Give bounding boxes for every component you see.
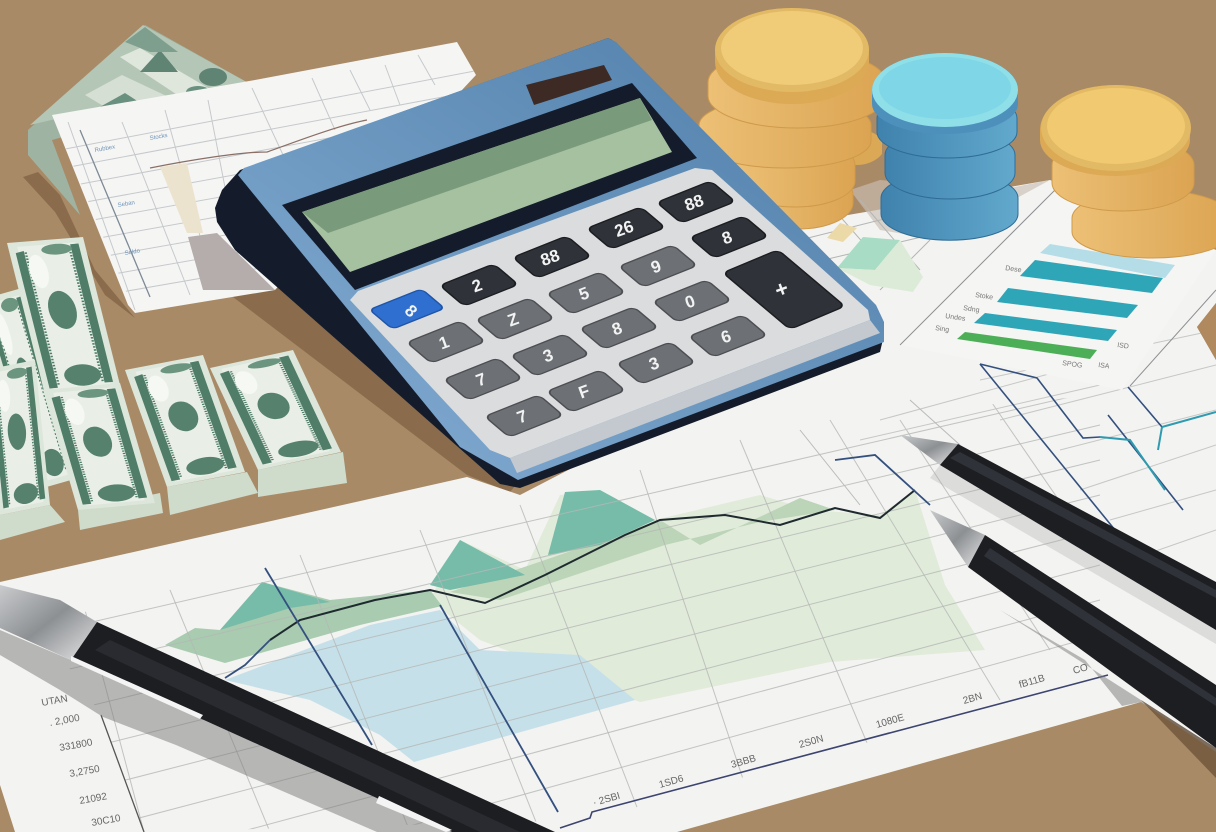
key labels: 5 <box>576 283 592 304</box>
bar: green <box>957 332 1097 359</box>
key labels: F <box>576 381 592 403</box>
bottom axis labels: 1SD6 <box>658 773 685 791</box>
key labels: 8 <box>401 301 421 321</box>
bottom axis labels: 2BN <box>962 691 984 707</box>
key labels: 1 <box>436 332 452 353</box>
small chart: squares behind the calculator <box>800 180 1050 292</box>
area: teal peaks <box>220 490 655 630</box>
sheet: top left line chart: Seban <box>117 200 135 209</box>
sheet: top left line chart: Stocks <box>149 133 168 142</box>
bottom axis labels: 1080E <box>875 712 906 731</box>
bar: teal <box>974 313 1117 341</box>
bottom axis labels <box>592 662 1089 809</box>
left axis labels: 30C10 <box>91 813 122 829</box>
shadow: money and sheet on desk <box>23 172 135 318</box>
left axis labels: 3,2750 <box>69 764 101 780</box>
banknotes: bottom left stacks <box>0 237 347 540</box>
main paper sheet <box>0 180 1216 832</box>
key labels: 9 <box>648 256 664 277</box>
key labels: + <box>771 275 792 303</box>
bar chart labels: ISA <box>1098 362 1110 371</box>
calculator blue body <box>238 38 884 480</box>
display shadow band <box>302 98 652 233</box>
left axis labels: . 2,000 <box>49 713 81 729</box>
display screen <box>302 98 672 272</box>
area chart: green and blue bands with trend line <box>165 490 985 762</box>
coins: left gold stack <box>699 8 886 229</box>
bottom axis labels: 2S0N <box>798 733 825 751</box>
blue key <box>369 289 445 329</box>
banknote stack: top left <box>28 25 252 215</box>
keypad panel <box>350 168 870 458</box>
bar: teal <box>1020 260 1163 293</box>
sheet: top left line chart: Saldo <box>124 248 141 257</box>
key labels: 26 <box>612 217 636 241</box>
key labels: 7 <box>514 406 530 427</box>
sheet: top left line chart: Rubbex <box>94 144 116 154</box>
dark keys <box>440 181 845 329</box>
bar: teal <box>997 288 1138 318</box>
left axis labels: 331800 <box>59 737 94 754</box>
key labels: 6 <box>718 326 734 347</box>
shadow: calculator on desk <box>215 215 520 492</box>
display bezel <box>282 83 697 290</box>
bar: pale blue <box>1040 244 1175 278</box>
left axis labels <box>41 694 122 829</box>
pen shadow on paper: bottom-left pen <box>0 630 452 832</box>
key labels: 8 <box>719 227 735 248</box>
key labels: Z <box>505 309 521 331</box>
bottom axis labels: CO <box>1072 662 1089 677</box>
key labels: 88 <box>682 191 706 215</box>
key labels <box>401 191 792 427</box>
bottom axis labels: fB11B <box>1018 673 1047 691</box>
key labels: 7 <box>473 369 489 390</box>
right line charts <box>800 330 1216 560</box>
trend line and navy lines <box>225 455 930 812</box>
key labels: 3 <box>646 353 662 374</box>
bottom axis labels: · 2SBI <box>592 791 622 809</box>
pen: lower right <box>930 510 1216 748</box>
sheet: bar chart <box>900 190 1216 390</box>
main chart grid <box>40 390 1100 832</box>
pen shadows: right pens <box>930 465 1216 778</box>
left axis labels: 21092 <box>79 791 108 807</box>
brown gap at the right edge <box>1197 303 1216 360</box>
sheet: top left line chart <box>52 42 480 313</box>
calculator base <box>215 38 884 488</box>
coins: blue stack <box>872 53 1018 240</box>
chart axis: bottom line <box>560 675 1108 828</box>
chart axis: left line <box>101 715 144 832</box>
bar chart labels: Sdng <box>963 305 980 314</box>
area: sage band <box>165 582 442 663</box>
calculator <box>215 38 884 488</box>
coins: right gold stack <box>1040 85 1216 258</box>
bar chart labels: Undes <box>945 313 966 323</box>
bar chart labels: Sing <box>935 325 950 334</box>
bar chart labels: SPOG <box>1062 360 1083 370</box>
area: blue <box>225 610 635 762</box>
area: light green <box>430 490 985 702</box>
left axis labels: UTAN <box>41 694 69 709</box>
bar chart labels: Stoke <box>975 292 994 301</box>
key labels: 88 <box>538 246 562 270</box>
bar chart labels: ISD <box>1117 342 1129 351</box>
pen: bottom left <box>0 585 555 832</box>
front lip <box>510 320 880 473</box>
solar panel <box>526 65 612 105</box>
bottom axis labels: 3BBB <box>730 753 758 771</box>
key labels: 2 <box>469 275 485 296</box>
pen: upper right <box>900 435 1216 630</box>
bar chart labels: Dese <box>1005 265 1022 274</box>
bar chart labels <box>935 265 1129 371</box>
grey keys <box>407 245 767 437</box>
area: mid sage <box>450 498 835 600</box>
key labels: 3 <box>540 345 556 366</box>
key labels: 0 <box>682 291 698 312</box>
key labels: 8 <box>609 318 625 339</box>
